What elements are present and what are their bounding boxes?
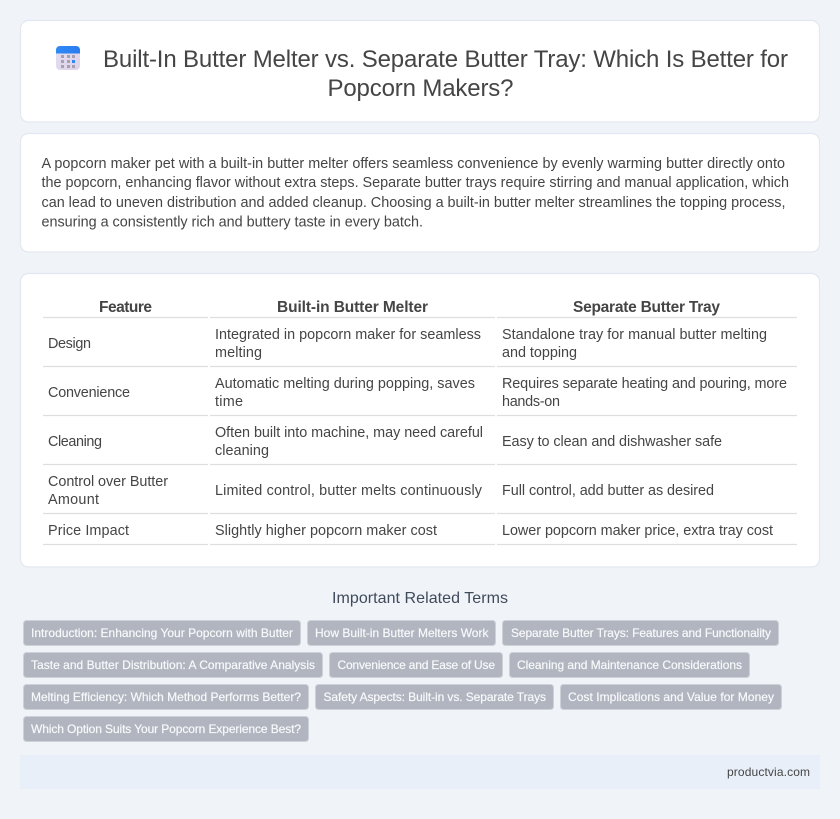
intro paragraph: can lead to uneven distribution and added cleanup. Choosing a built-in butter melter streamlines the topping process, bbox=[42, 195, 786, 211]
title: Popcorn Makers? bbox=[328, 75, 514, 102]
tag bbox=[330, 652, 502, 678]
tag: Introduction: Enhancing Your Popcorn with Butter bbox=[31, 626, 293, 640]
panel: comparison table bbox=[20, 274, 820, 567]
row: control over butter amount: Full control, add butter as desired bbox=[502, 483, 714, 499]
tag: Which Option Suits Your Popcorn Experience Best? bbox=[31, 722, 301, 736]
row: design: Standalone tray for manual butter melting bbox=[502, 327, 767, 343]
tag bbox=[560, 684, 782, 710]
tag bbox=[24, 716, 308, 742]
row: convenience: time bbox=[215, 394, 243, 410]
row: design: Integrated in popcorn maker for seamless bbox=[215, 327, 481, 343]
heading: important related terms: Important Related Terms bbox=[332, 590, 508, 607]
row: cleaning bbox=[48, 425, 722, 459]
tag bbox=[308, 620, 496, 646]
title: Built-In Butter Melter vs. Separate Butter Tray: Which Is Better for bbox=[103, 46, 788, 73]
row: cleaning: Cleaning bbox=[48, 434, 102, 450]
row: cleaning: Often built into machine, may need careful bbox=[215, 425, 483, 441]
tag: Cost Implications and Value for Money bbox=[568, 690, 774, 704]
row: cleaning: cleaning bbox=[215, 443, 269, 459]
row: design: and topping bbox=[502, 345, 577, 361]
tag bbox=[316, 684, 554, 710]
row: control over butter amount: Control over Butter bbox=[48, 474, 168, 490]
row: control over butter amount: Amount bbox=[48, 492, 99, 508]
row: price impact: Slightly higher popcorn maker cost bbox=[215, 523, 437, 539]
row: convenience: hands-on bbox=[502, 394, 560, 410]
tag bbox=[24, 620, 300, 646]
icon: calendar bbox=[56, 46, 80, 70]
row: design: melting bbox=[215, 345, 262, 361]
tag bbox=[24, 652, 322, 678]
intro paragraph: the popcorn, enhancing flavor without extra steps. Separate butter trays require stirring and manual application, which bbox=[42, 175, 789, 191]
title bbox=[103, 46, 788, 102]
row: convenience: Automatic melting during popping, saves bbox=[215, 376, 475, 392]
footer bbox=[20, 755, 820, 789]
tag: Safety Aspects: Built-in vs. Separate Trays bbox=[324, 690, 546, 704]
row: control over butter amount: Limited control, butter melts continuously bbox=[215, 483, 483, 499]
row: convenience: Requires separate heating and pouring, more bbox=[502, 376, 787, 392]
intro paragraph: ensuring a consistently rich and buttery taste in every batch. bbox=[42, 214, 423, 230]
tag bbox=[510, 652, 750, 678]
row: price impact: Lower popcorn maker price, extra tray cost bbox=[502, 523, 773, 539]
row: convenience: Convenience bbox=[48, 385, 130, 401]
header panel bbox=[20, 20, 820, 122]
intro paragraph: A popcorn maker pet with a built-in butter melter offers seamless convenience by evenly warming butter directly onto bbox=[42, 156, 785, 172]
tag: Cleaning and Maintenance Considerations bbox=[517, 658, 742, 672]
row: cleaning: Easy to clean and dishwasher safe bbox=[502, 434, 722, 450]
tag bbox=[24, 684, 308, 710]
table header: Built-in Butter Melter bbox=[277, 299, 428, 316]
row: convenience bbox=[48, 376, 787, 410]
footer: productvia.com bbox=[727, 765, 810, 779]
row: design: Design bbox=[48, 336, 91, 352]
table header: Separate Butter Tray bbox=[573, 299, 720, 316]
row: price impact: Price Impact bbox=[48, 523, 129, 539]
tag: Melting Efficiency: Which Method Performs Better? bbox=[31, 690, 301, 704]
row: control over butter amount bbox=[48, 474, 714, 508]
row: price impact bbox=[48, 523, 773, 539]
intro paragraph bbox=[42, 156, 789, 230]
table header bbox=[99, 299, 720, 316]
tag: How Built-in Butter Melters Work bbox=[315, 626, 490, 640]
table header: Feature bbox=[99, 299, 152, 316]
related term tags bbox=[24, 620, 782, 742]
tag: Taste and Butter Distribution: A Comparative Analysis bbox=[31, 658, 315, 672]
row: design bbox=[48, 327, 767, 361]
tag: Separate Butter Trays: Features and Functionality bbox=[511, 626, 771, 640]
panel: introduction bbox=[20, 134, 820, 252]
tag: Convenience and Ease of Use bbox=[338, 658, 495, 672]
tag bbox=[502, 620, 778, 646]
